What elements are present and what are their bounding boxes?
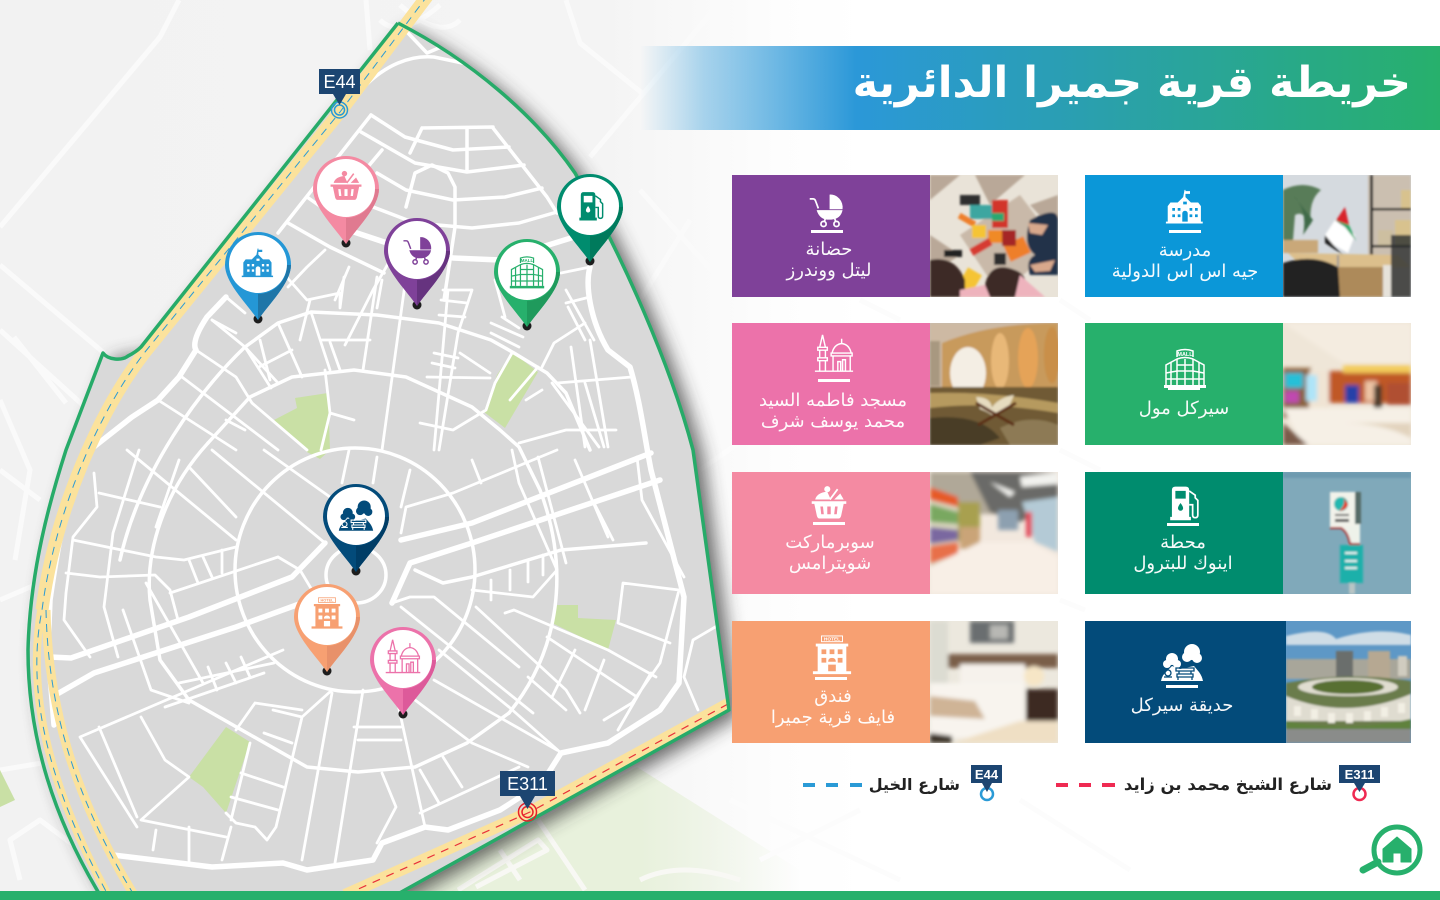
road tag E44: E44 [323, 72, 356, 92]
tag E311: E311 [1345, 767, 1374, 782]
title: خريطة قرية جميرا الدائرية [853, 58, 1411, 108]
tag E44 [971, 765, 1002, 802]
legend text: شارع الشيخ محمد بن زايد [1124, 775, 1332, 794]
dashes blue [803, 783, 862, 787]
card: petrol station [1085, 472, 1411, 594]
card: petrol station: محطة [1160, 532, 1206, 553]
pin: nursery [384, 218, 450, 310]
card: supermarket [732, 472, 1058, 594]
pale green lot [400, 767, 800, 895]
legend text: شارع الخيل [869, 775, 960, 794]
road tag E311: E311 [507, 774, 548, 794]
roads and parks [48, 33, 722, 870]
photo: supermarket aisle [930, 472, 1058, 594]
photo: Jumeirah Village Circle aerial [1286, 621, 1411, 743]
card: supermarket: سوبرماركت [785, 532, 875, 553]
card: nursery: ليتل ووندرز [787, 260, 871, 280]
photo: classroom with UAE flag [1283, 175, 1411, 297]
card: school: جيه اس اس الدولية [1112, 260, 1258, 282]
map green outline [28, 23, 729, 895]
photo: children playing [930, 175, 1058, 297]
card: nursery: حضانة [806, 239, 852, 260]
pin: school [225, 232, 291, 324]
tag E44: E44 [975, 767, 999, 782]
legend: Al Khail road [803, 765, 1002, 802]
card: petrol station: اينوك للبترول [1133, 552, 1233, 574]
pin: supermarket [313, 156, 379, 248]
pin: mall [494, 239, 560, 330]
card: school: مدرسة [1159, 240, 1211, 261]
title banner [640, 46, 1440, 130]
bottom green bar [0, 891, 1440, 900]
card: hotel: فندق [814, 686, 852, 707]
tag E311 [1339, 765, 1380, 802]
photo: blurred shopping mall [1283, 323, 1411, 445]
card: park [1085, 621, 1411, 743]
pin: petrol station [557, 174, 623, 266]
card: park: حديقة سيركل [1131, 695, 1233, 716]
photo: hotel room [930, 621, 1058, 743]
dashes red [1056, 783, 1115, 787]
card: mall [1085, 323, 1411, 445]
road: Al Khail yellow with blue dashes [37, 0, 428, 895]
logo: magnifier with house [1360, 824, 1422, 876]
road tag E311 [500, 771, 555, 821]
map shadow [38, 29, 739, 900]
road: Sheikh Mohammed bin Zayed yellow with red dashes [345, 704, 728, 895]
card: mosque: محمد يوسف شرف [761, 410, 905, 432]
legend: Sheikh Mohammed bin Zayed road [1056, 765, 1380, 802]
background map panel [0, 0, 774, 891]
card: mosque: مسجد فاطمه السيد [759, 390, 907, 411]
card: mosque [732, 323, 1058, 445]
photo: ENOC sign [1283, 472, 1411, 594]
pin: mosque [370, 627, 436, 718]
card: school [1085, 175, 1411, 297]
photo: mosque interior with Quran [930, 323, 1058, 445]
green patch outside [0, 770, 15, 807]
card: supermarket: شويترامس [789, 552, 871, 574]
pin: park [323, 484, 389, 576]
card: hotel [732, 621, 1058, 743]
parks [189, 352, 616, 813]
road tag E44 [319, 69, 360, 118]
card: hotel: فايف قرية جميرا [771, 706, 895, 728]
card: mall: سيركل مول [1139, 398, 1229, 419]
map land [28, 23, 729, 895]
card: nursery [732, 175, 1058, 297]
pin: hotel [294, 584, 360, 676]
